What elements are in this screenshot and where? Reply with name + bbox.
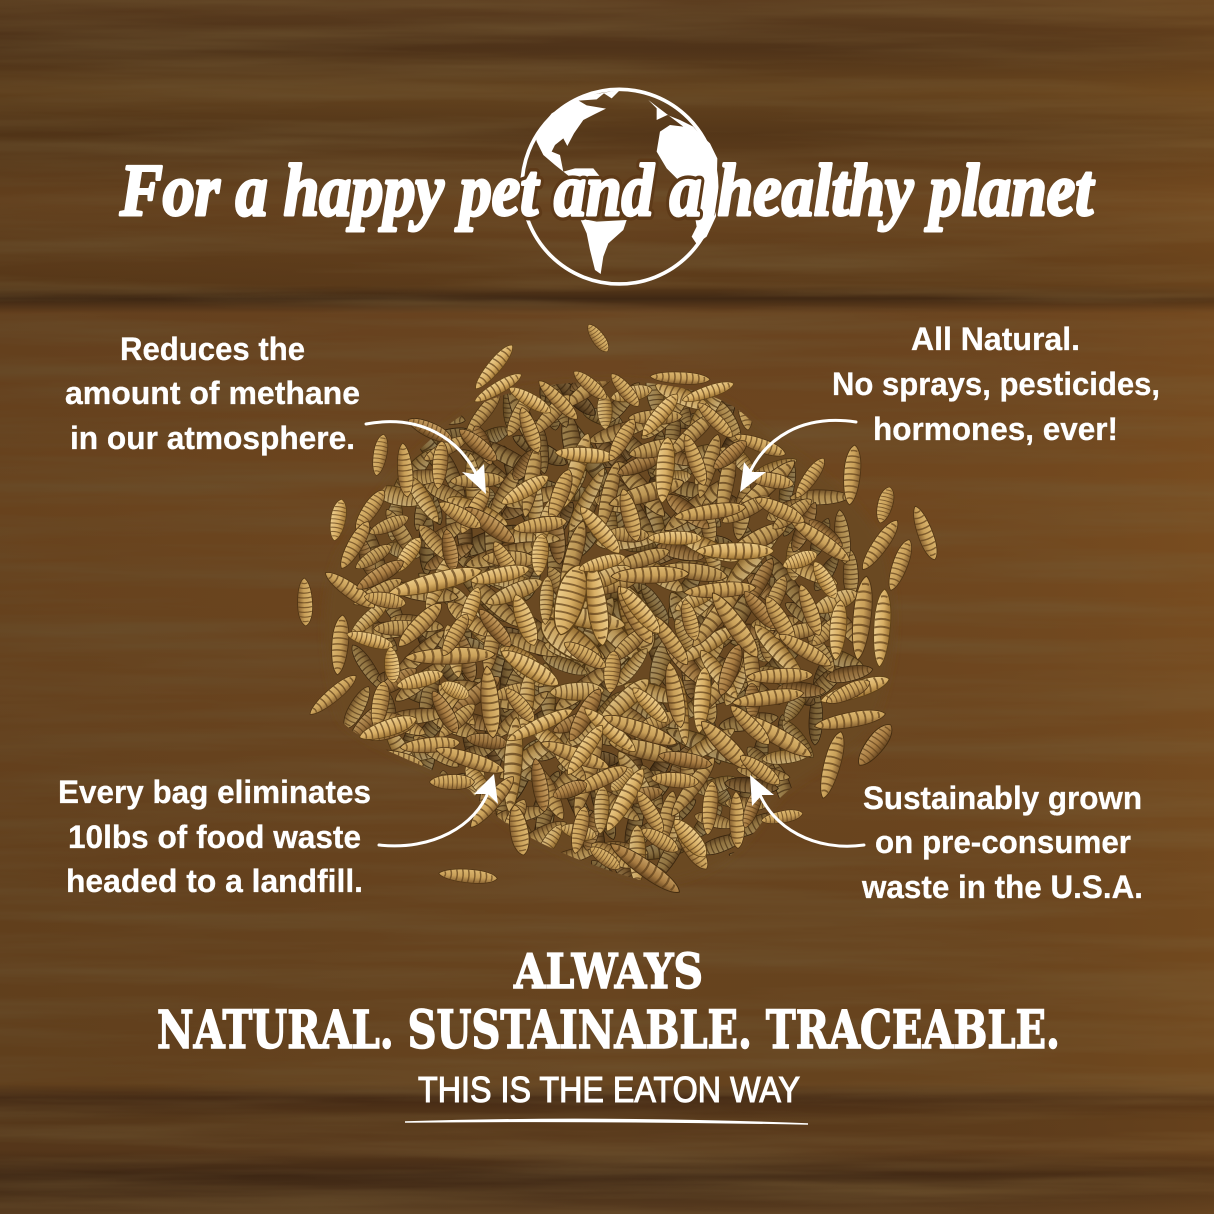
closing headline: ALWAYS [513,944,703,1000]
arrow: methane [366,422,486,494]
callout: all natural: All Natural. [911,321,1080,357]
arrow: sustainably grown [750,775,864,846]
callout: food waste: Every bag eliminates [58,774,371,810]
insect larvae pile [297,324,938,893]
callout: sustainably grown: on pre-consumer [875,824,1131,860]
title: For a happy pet and a healthy planet [119,150,1095,232]
arrow: all natural [740,420,856,492]
callout: sustainably grown: Sustainably grown [863,780,1142,816]
callout: all natural: hormones, ever! [873,411,1118,447]
callout: food waste [58,774,371,899]
tagline [405,1069,808,1124]
icon: globe [522,89,717,284]
callout: sustainably grown [861,780,1143,905]
callout: food waste: 10lbs of food waste [68,819,361,855]
arrow: food waste [379,774,498,846]
callout: methane: amount of methane [65,375,360,411]
callout: methane: in our atmosphere. [70,420,355,456]
tagline: THIS IS THE EATON WAY [418,1069,800,1110]
callout: food waste: headed to a landfill. [66,863,363,899]
callout: methane: Reduces the [120,331,305,367]
callout: all natural: No sprays, pesticides, [832,366,1160,402]
closing headline [157,944,1060,1061]
callout: sustainably grown: waste in the U.S.A. [861,869,1143,905]
callout: methane [65,331,360,456]
callout: all natural [832,321,1160,447]
title: For a happy pet and a healthy planet [119,150,1095,232]
